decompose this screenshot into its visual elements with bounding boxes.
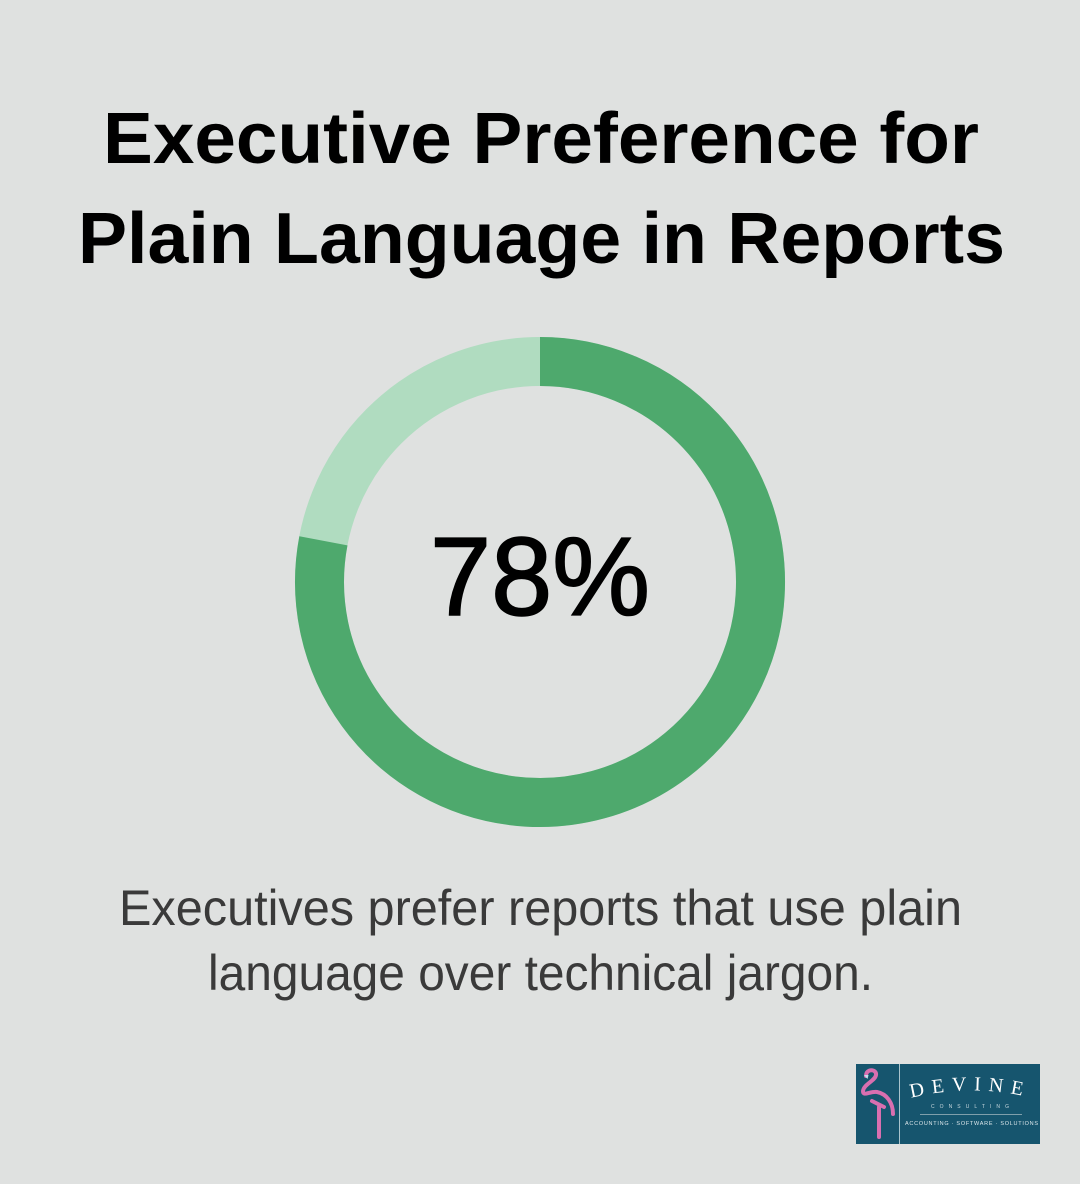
- remaining segment: 22%: [320, 362, 760, 802]
- description: [119, 880, 962, 1001]
- value: 78%: 78%: [430, 515, 650, 639]
- title: Plain Language in Reports: [78, 199, 1005, 279]
- icon: flamingo: [863, 1070, 893, 1137]
- donut chart: 78%: [320, 362, 761, 802]
- description: Executives prefer reports that use plain: [119, 880, 962, 936]
- brand name: DEVINE: [908, 1077, 1023, 1098]
- title: Executive Preference for: [103, 99, 979, 179]
- logo: Devine Consulting: [856, 1064, 1040, 1144]
- logo: Devine Consulting: ACCOUNTING · SOFTWARE · SOLUTIONS: [905, 1121, 1038, 1127]
- logo: Devine Consulting: CONSULTING: [931, 1104, 1009, 1110]
- value segment: 78%: [320, 362, 761, 802]
- description: language over technical jargon.: [208, 945, 873, 1001]
- title: [78, 99, 1005, 279]
